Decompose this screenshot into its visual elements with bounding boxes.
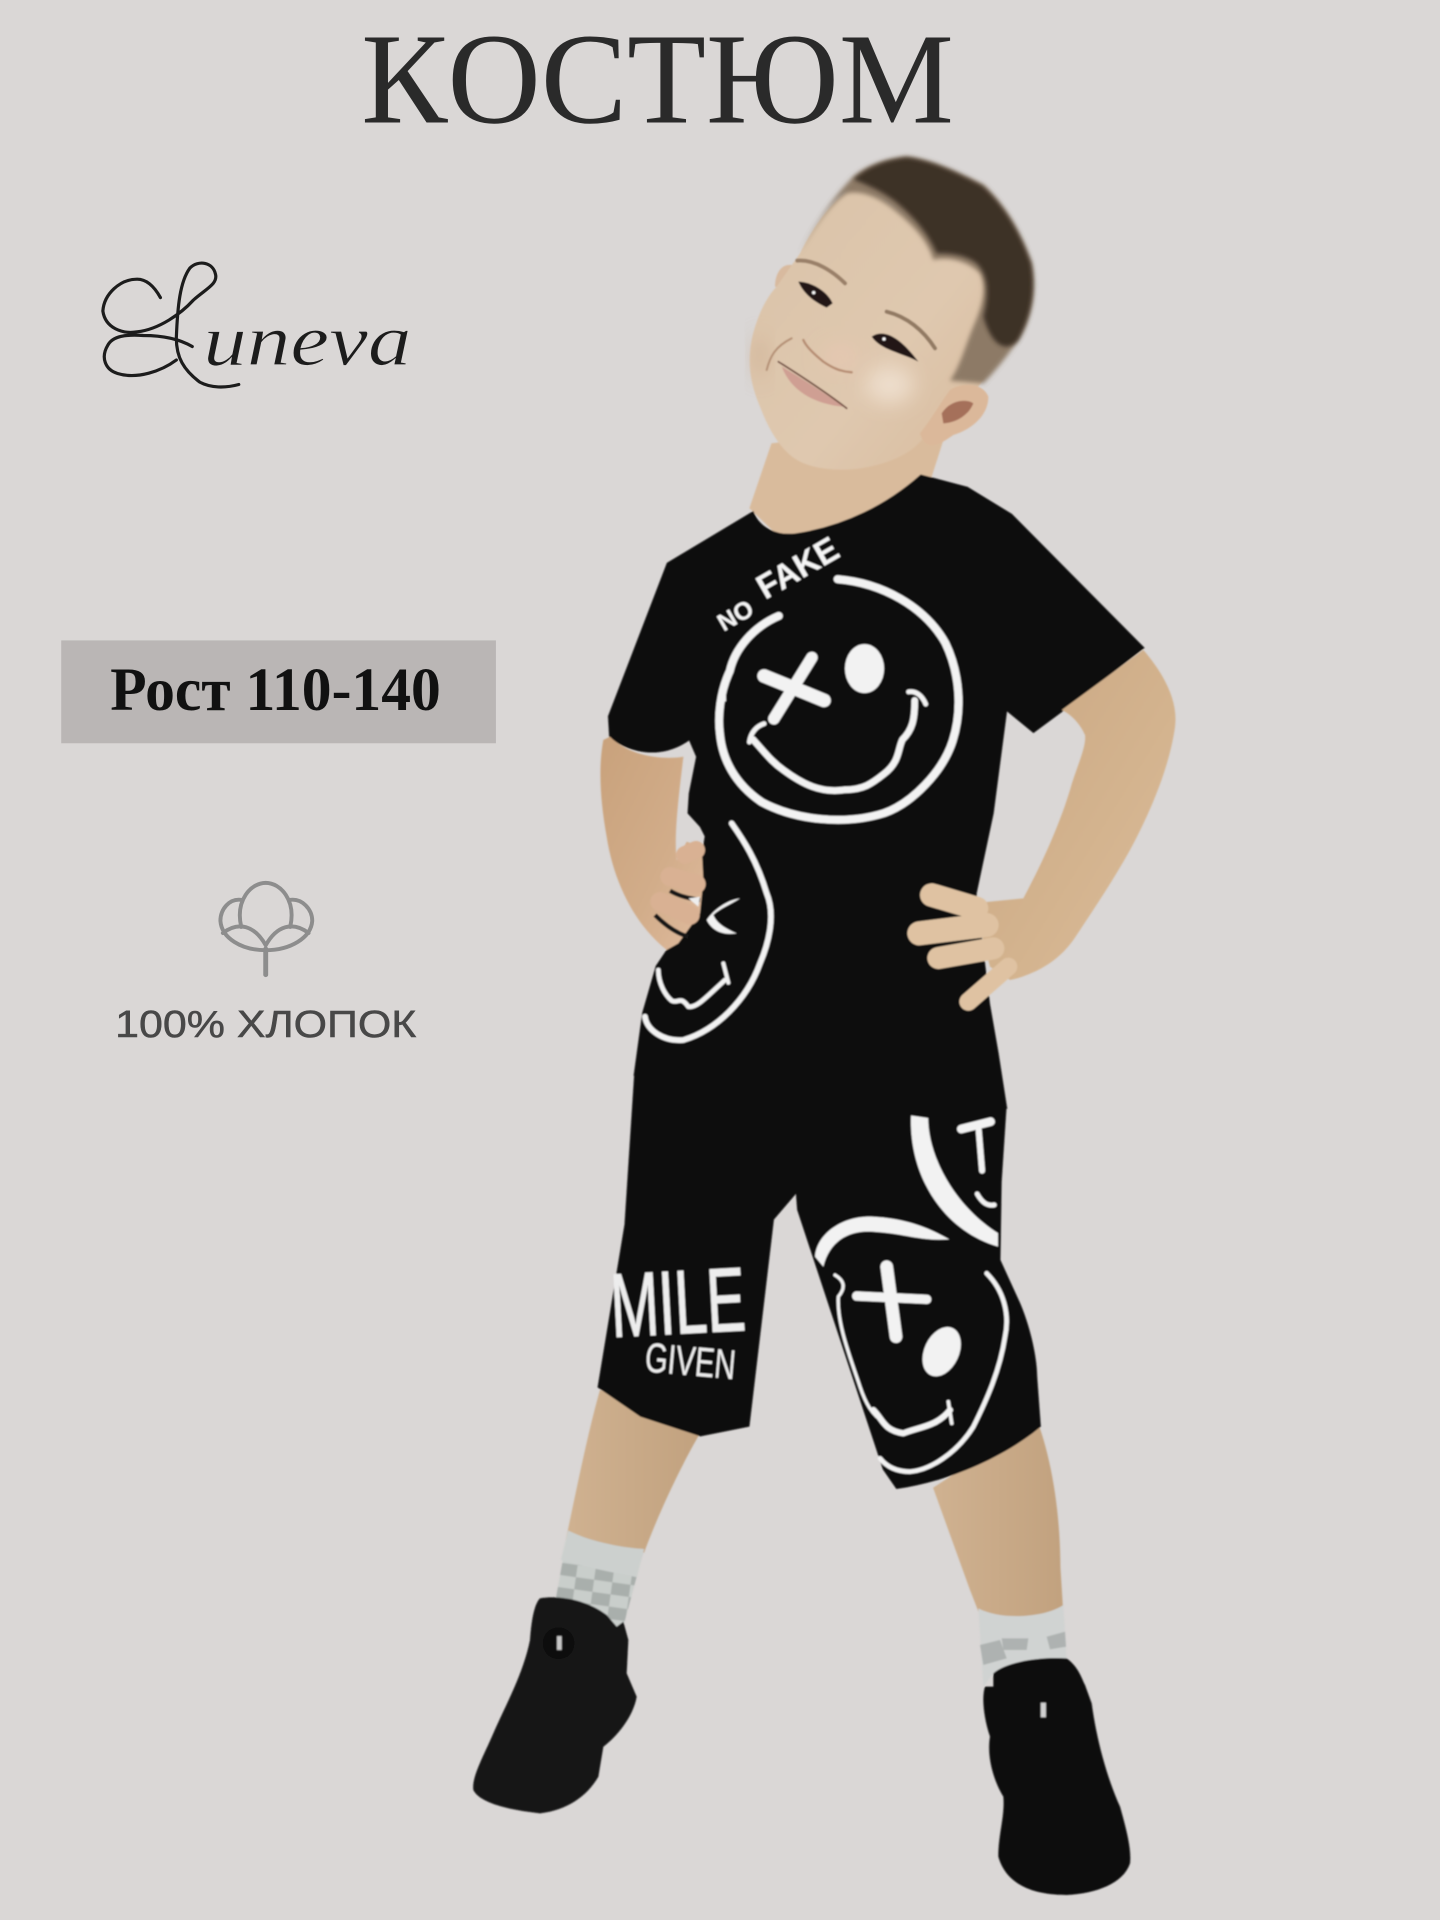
left shoe <box>473 1597 637 1813</box>
print: smile text: MILE <box>608 1249 748 1357</box>
shorts <box>598 1073 1041 1489</box>
print: small smiley on shorts <box>911 1116 998 1247</box>
print: no fake: FAKE <box>750 530 846 607</box>
right sock <box>978 1605 1067 1687</box>
mouth <box>767 338 847 408</box>
print: large smiley on tee <box>719 579 959 820</box>
left sock <box>556 1531 644 1631</box>
right shoe <box>983 1658 1130 1895</box>
cheek highlight <box>867 367 913 403</box>
left eye <box>797 261 845 308</box>
near ear <box>920 385 988 445</box>
nose <box>803 340 852 372</box>
hair fade <box>800 157 1034 383</box>
brand logo: uneva <box>203 300 411 381</box>
print: lower smiley on tee <box>645 823 771 1040</box>
print: no fake: NO <box>713 595 758 637</box>
print: big smiley on shorts <box>815 1217 1007 1472</box>
hair core <box>853 157 1033 347</box>
nose shading <box>822 343 858 370</box>
left arm and hand <box>600 737 703 950</box>
t-shirt <box>609 475 1144 1108</box>
print: given text: GIVEN <box>643 1334 738 1388</box>
far ear <box>775 265 798 288</box>
right arm and hand <box>919 650 1175 1002</box>
brand logo <box>103 263 411 387</box>
title: КОСТЮМ <box>361 7 954 151</box>
head <box>750 157 1034 470</box>
cheek shadow <box>753 333 767 380</box>
cotton label: 100% ХЛОПОК <box>115 1004 416 1046</box>
icon: cotton <box>220 883 312 975</box>
height badge <box>61 640 496 743</box>
right leg <box>933 1420 1063 1618</box>
face shape <box>750 183 987 470</box>
right eye <box>872 312 935 362</box>
height badge: Рост 110-140 <box>110 656 441 724</box>
boy figure <box>473 157 1175 1895</box>
print: no fake <box>713 530 846 637</box>
left leg <box>566 1390 700 1553</box>
neck <box>749 422 949 541</box>
